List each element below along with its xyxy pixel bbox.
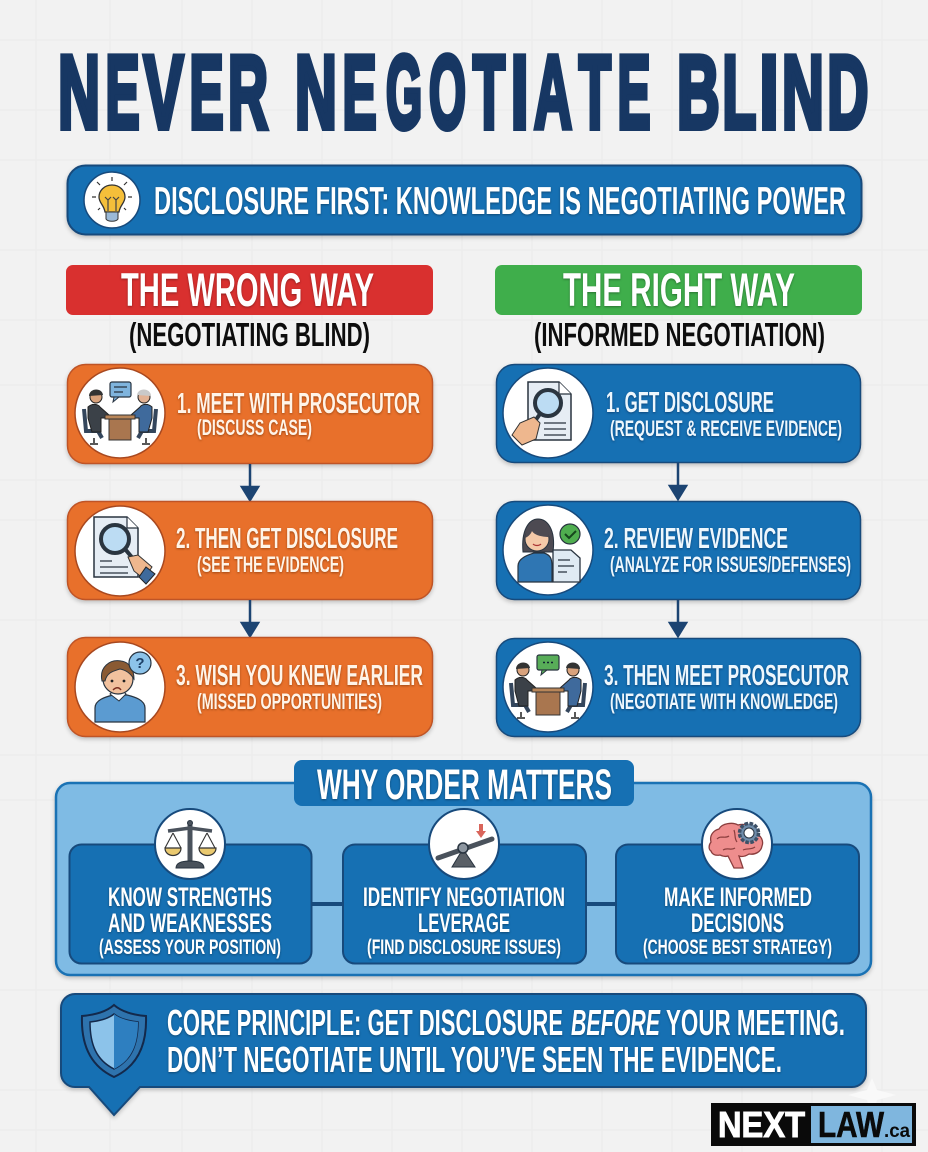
title: T	[579, 35, 611, 151]
panel: the wrong way	[66, 263, 433, 736]
step: get disclosure	[496, 364, 860, 462]
step: meet with prosecutor	[68, 364, 432, 464]
title: D	[827, 35, 868, 151]
icon: shield	[82, 1005, 146, 1077]
heading: the wrong way	[66, 263, 433, 316]
panel: why order matters	[56, 760, 871, 975]
card: know strengths and weaknesses	[70, 809, 312, 964]
card detail: (CHOOSE BEST STRATEGY)	[643, 936, 832, 959]
heading: why order matters: WHY ORDER MATTERS	[317, 761, 612, 809]
heading: why order matters	[294, 760, 634, 809]
title: V	[144, 35, 183, 151]
step text: 1. MEET WITH PROSECUTOR	[177, 388, 420, 420]
card text: IDENTIFY NEGOTIATION	[363, 882, 565, 912]
arrow	[242, 600, 258, 636]
title: O	[429, 35, 466, 151]
title: I	[759, 35, 779, 151]
icon: worried person: ?	[135, 655, 145, 672]
card text: KNOW STRENGTHS	[108, 882, 272, 912]
icon: lawyer with document	[503, 505, 593, 595]
card: make informed decisions: DECISIONS	[691, 908, 784, 938]
title: T	[473, 35, 505, 151]
arrow	[242, 464, 258, 500]
subheading: negotiating blind: (NEGOTIATING BLIND)	[129, 316, 370, 353]
step: then meet prosecutor	[496, 638, 860, 736]
logo: next law: .ca	[884, 1121, 910, 1142]
title: E	[190, 35, 224, 151]
card detail: (FIND DISCLOSURE ISSUES)	[367, 936, 561, 959]
banner: disclosure first	[68, 166, 862, 234]
step: review evidence	[496, 502, 860, 600]
heading: the right way	[495, 263, 862, 316]
title: G	[386, 35, 422, 151]
panel: the right way	[495, 263, 862, 736]
step text: 2. THEN GET DISCLOSURE	[176, 523, 398, 555]
heading: the wrong way: THE WRONG WAY	[121, 263, 374, 316]
callout: core principle	[61, 994, 866, 1115]
title: R	[228, 35, 268, 151]
callout text line 1: BEFORE	[571, 1002, 661, 1043]
step text: 2. REVIEW EVIDENCE	[604, 523, 788, 555]
icon: lever and fulcrum	[429, 809, 499, 879]
card detail: (ASSESS YOUR POSITION)	[99, 936, 281, 959]
title: I	[511, 35, 529, 151]
icon: light bulb	[84, 172, 140, 228]
card: identify negotiation leverage: LEVERAGE	[418, 908, 510, 938]
title: N	[782, 35, 824, 151]
step: then get disclosure	[68, 502, 432, 600]
heading: the right way: THE RIGHT WAY	[563, 263, 795, 316]
arrow	[670, 600, 686, 636]
step text: 1. GET DISCLOSURE	[606, 387, 774, 419]
step text: 3. WISH YOU KNEW EARLIER	[176, 660, 423, 692]
card: make informed decisions	[616, 809, 859, 964]
title: E	[106, 35, 140, 151]
title: N	[295, 35, 337, 151]
title: N	[58, 35, 100, 151]
step detail: (SEE THE EVIDENCE)	[197, 552, 344, 577]
title: E	[342, 35, 377, 151]
card: identify negotiation leverage	[343, 809, 586, 964]
arrow	[670, 463, 686, 499]
title: L	[722, 35, 756, 151]
step detail: (MISSED OPPORTUNITIES)	[197, 689, 382, 714]
icon: scales of justice	[155, 809, 225, 879]
icon: meeting with speech bubble	[503, 642, 593, 732]
icon: brain and gear	[702, 809, 772, 879]
callout text line 1: CORE PRINCIPLE: GET DISCLOSURE	[167, 1002, 563, 1043]
logo: next law: LAW	[818, 1104, 884, 1145]
icon: magnifier over document	[75, 506, 165, 596]
logo: next law	[711, 1078, 916, 1146]
step detail: (DISCUSS CASE)	[197, 415, 312, 440]
card: know strengths and weaknesses: AND WEAKNESSES	[108, 908, 272, 938]
logo: next law: NEXT	[718, 1104, 805, 1145]
icon: meeting at table	[75, 368, 165, 458]
title: B	[677, 35, 720, 151]
step: wish you knew earlier	[68, 638, 432, 736]
card text: MAKE INFORMED	[664, 882, 812, 912]
title: A	[534, 35, 572, 151]
icon: hand with magnifier	[503, 368, 593, 458]
title: E	[618, 35, 650, 151]
icon: worried person	[75, 642, 165, 732]
